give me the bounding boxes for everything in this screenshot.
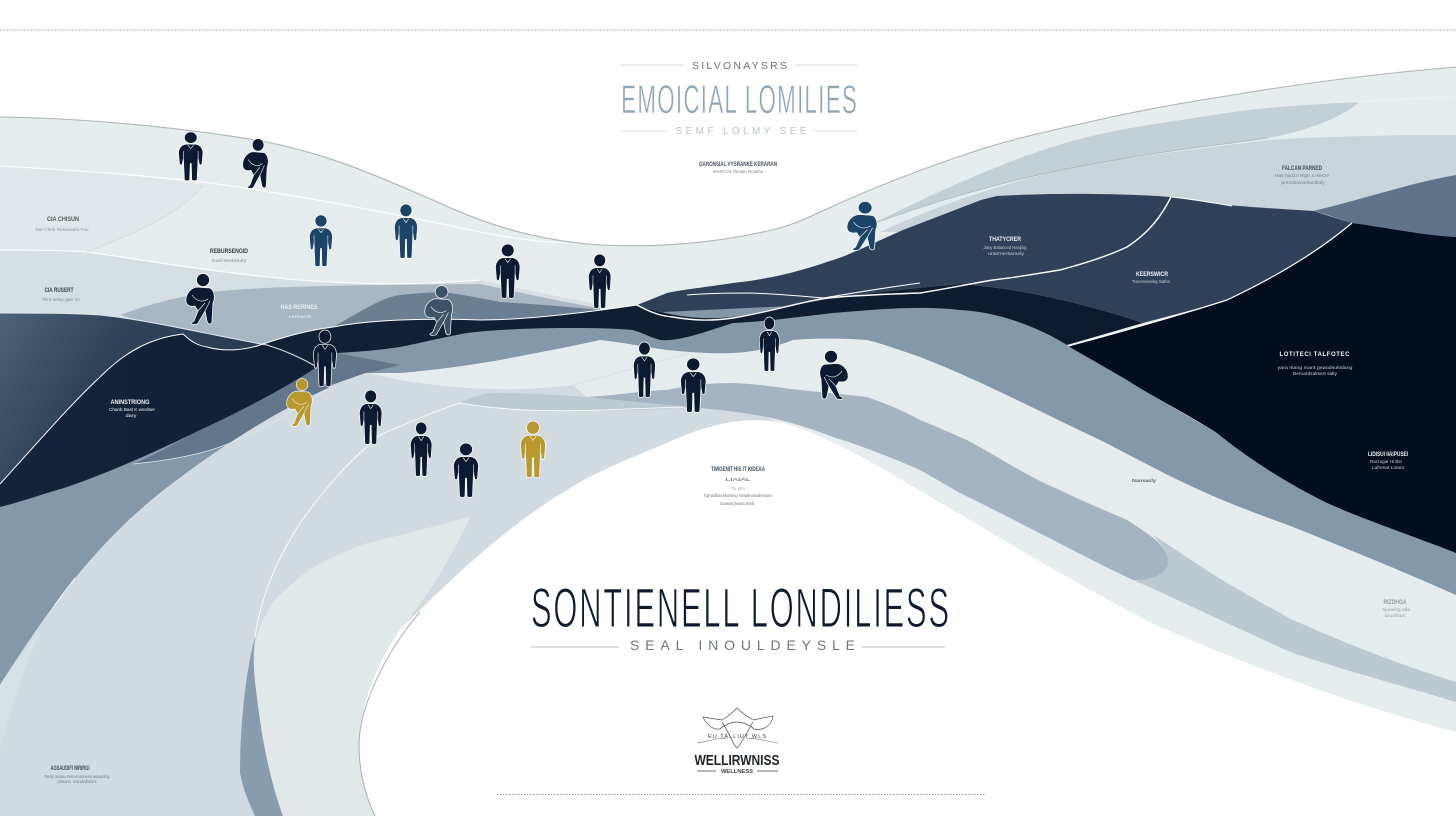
- label: right navy lower: [1368, 452, 1408, 470]
- wave: left slate: [0, 313, 317, 510]
- figure 6: [588, 254, 611, 308]
- label: slate arc: unternersamely: [988, 251, 1025, 256]
- label: second left: Gad sentioniry: [212, 258, 247, 263]
- label: right navy main: Bernardzaksert salty: [1293, 371, 1338, 376]
- label: centre void: Tgmaribanskursing strwdinamdiresane: [704, 493, 773, 498]
- figure 9: [425, 285, 453, 335]
- wave: central slate band: [637, 194, 1352, 323]
- wave: lower sliver: [240, 637, 283, 816]
- label: slate arc: Jany Balanced Hanjing: [984, 245, 1027, 250]
- secondary title: EMOICIAL LOMILIES: [621, 77, 857, 122]
- wave: inner pale panel: [254, 517, 470, 816]
- figure 3: [309, 215, 332, 267]
- wave: upper-left panel: [0, 166, 203, 252]
- label: left navy: Chanb Bast K werdser: [109, 407, 155, 412]
- figure 11: [287, 378, 312, 426]
- header note: GARONSIAL VYSRANKE KERARAN: [699, 162, 777, 168]
- label: bottom left: [44, 766, 110, 784]
- label: right navy lower: LIDISUI IIAIPUSEI: [1368, 452, 1408, 458]
- header block: [621, 60, 857, 174]
- wave: upper-right wedge: [870, 102, 1359, 225]
- label: centre void: Ta sim: [731, 486, 745, 491]
- label: bottom left: Resty wcasu Pennenzenerm asuarding: [44, 774, 110, 779]
- label: lower right: Ajuovizg alfa: [1382, 607, 1410, 612]
- label: bottom left: prtdans. mandzdionirs: [58, 779, 97, 784]
- secondary subtitle: SEMF LOLMY SEE: [676, 126, 807, 137]
- label: bottom left: AGSAUDIFI NIRIRGI: [50, 766, 90, 772]
- main subtitle: SEAL INOULDEYSLE: [630, 637, 855, 653]
- label: gray wedge: [280, 305, 318, 319]
- label: upper right: Hair hadzzi Rigtr a Isecze: [1275, 173, 1329, 178]
- label: pale band: Nansacly: [1132, 478, 1157, 483]
- logo name: WELLIRWNISS: [694, 752, 780, 769]
- emblem text: EU TALLIUT WLS: [708, 734, 766, 740]
- label: left navy: [109, 400, 155, 418]
- small labels: [36, 166, 1410, 784]
- label: slate centre: KEERSWICR: [1136, 272, 1169, 278]
- label: left band: Tent selvy gan Gr: [42, 297, 80, 302]
- figure 10: [313, 330, 336, 387]
- header note: MARYUS Tlender Roadns: [713, 169, 764, 174]
- bottom dotted rule: [497, 794, 985, 796]
- figure 8: [186, 274, 214, 324]
- label: centre void: Soanarghstwa tsedl: [720, 501, 754, 506]
- figure 16: [633, 342, 655, 398]
- label: upper left: [36, 217, 89, 232]
- label: centre void: [704, 467, 773, 506]
- label: gray wedge: HAS RERINES: [280, 305, 318, 311]
- wave: middle gray wedge: [120, 284, 600, 365]
- label: lower right: seuziltars: [1384, 613, 1406, 618]
- wave: dark gray shoulder: [133, 353, 400, 464]
- header note: [699, 162, 777, 174]
- figure 4: [394, 204, 417, 258]
- label: lower right: RIZDHGA: [1384, 600, 1407, 606]
- label: slate arc: [984, 237, 1027, 256]
- wave: darker gray wedge: [333, 292, 600, 345]
- label: right navy main: LOTITECI TALFOTEC: [1280, 352, 1350, 358]
- figure 12: [359, 390, 382, 444]
- figure 5: [495, 244, 520, 298]
- label: slate centre: Tucesowsing Saths: [1132, 279, 1171, 284]
- figure 18: [759, 317, 779, 371]
- figure 1: [178, 132, 203, 181]
- label: upper right: prendzavtanlandialy: [1282, 180, 1325, 185]
- wave: contour lines: [0, 97, 1456, 637]
- label: right navy lower: Lafrenat Lorant: [1372, 465, 1405, 470]
- label: upper right: FALCAN PARNED: [1282, 166, 1323, 172]
- logo tagline: WELLNESS: [721, 769, 754, 775]
- wave: left light band: [0, 250, 600, 340]
- wave: right navy field: [1068, 223, 1456, 553]
- label: left navy: ANINSTRIONG: [110, 400, 150, 406]
- label: lower right: [1382, 600, 1410, 618]
- logo: wellness emblem: [694, 708, 780, 775]
- label: centre void: TWIGENIT HIS IT KIDEAA: [711, 467, 765, 473]
- wave: navy river: [0, 284, 1143, 507]
- label: slate arc: THATYCRER: [989, 237, 1022, 243]
- people figures: [178, 132, 877, 497]
- label: right navy main: [1278, 352, 1353, 376]
- figure 14: [454, 443, 478, 497]
- label: second left: REBURSENGID: [210, 249, 249, 255]
- wave: shade ribbon: [587, 383, 1168, 580]
- figure 19: [820, 350, 848, 399]
- wave: upper-right mid panel: [880, 135, 1456, 232]
- label: upper left: Dar Cheb Rosenanto Foo: [36, 227, 89, 232]
- wave: lower-left edge highlight: [0, 628, 42, 750]
- label: left band: [42, 288, 80, 302]
- figure 13: [410, 422, 432, 476]
- label: gray wedge: Lenhardit: [288, 314, 312, 319]
- main title: SONTIENELL LONDILIESS: [531, 576, 949, 639]
- figure 15: [520, 421, 546, 478]
- label: left band: CIA RUSERT: [44, 288, 74, 294]
- wave: lower-left large panel: [0, 373, 790, 816]
- wave: lower-left outline: [359, 612, 420, 816]
- label: slate centre: [1132, 272, 1171, 284]
- label: centre void: LIAIAL: [726, 477, 751, 482]
- label: left navy: dary: [126, 413, 137, 418]
- wave: gray-blue band: [0, 298, 1456, 685]
- wave: top outline: [0, 67, 1456, 246]
- wave: white lower void: [359, 420, 1456, 816]
- top dotted rule: [0, 29, 1456, 31]
- wave: steel wedge: [1313, 175, 1456, 237]
- label: right navy main: yara Isang mant geandsukslang: [1278, 365, 1353, 370]
- emblem wings: [697, 708, 778, 748]
- label: second left: [210, 249, 249, 263]
- figure 17: [681, 358, 706, 412]
- figure 2: [243, 138, 268, 188]
- wave: secondary gray ribbon: [460, 393, 683, 410]
- eyebrow: SILVONAYSRS: [692, 60, 787, 72]
- wave: right fading ribbon: [1133, 535, 1456, 702]
- label: upper left: CIA CHISUN: [47, 217, 79, 223]
- label: upper right: [1275, 166, 1329, 185]
- figure 7: [847, 201, 877, 250]
- label: right navy lower: Rarzugar Hi Bin: [1370, 459, 1402, 464]
